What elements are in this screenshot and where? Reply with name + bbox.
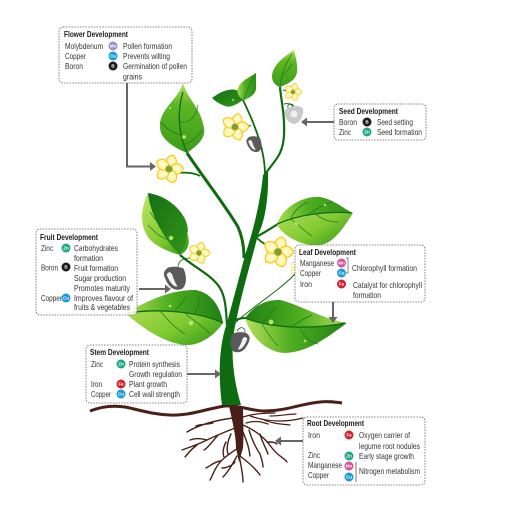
- panel: root development: Nitrogen metabolism: [359, 466, 420, 476]
- panel: leaf development: Iron: [300, 279, 312, 289]
- panel: root development: Mn: [346, 464, 352, 469]
- panel: seed development: Seed formation: [377, 127, 422, 137]
- panel: seed development: Seed setting: [377, 117, 413, 127]
- panel: seed development: Boron: [339, 117, 357, 127]
- panel: flower development: Pollen formation: [123, 41, 172, 51]
- panel: leaf development: Cu: [338, 271, 345, 276]
- panel: root development: Zn: [346, 454, 352, 459]
- arrow: stem: [187, 370, 221, 378]
- panel: fruit development: Improves flavour of: [74, 293, 134, 303]
- panel: stem development: Cu: [118, 392, 124, 397]
- panel: fruit development: formation: [74, 253, 103, 263]
- panel: fruit development: Zn: [63, 246, 69, 251]
- panel: root development: [303, 417, 425, 485]
- panel: seed development: B: [365, 120, 369, 125]
- fruits and seed: [164, 104, 303, 352]
- panel: leaf development: Manganese: [300, 258, 334, 268]
- heading: flower: Flower Development: [64, 29, 128, 39]
- panel: root development: Early stage growth: [359, 451, 414, 461]
- panel: flower development: Boron: [65, 61, 83, 71]
- arrow: fruit: [139, 284, 171, 294]
- panel: leaf development: Chlorophyll formation: [352, 263, 417, 273]
- panel: fruit development: [36, 229, 137, 315]
- panel: stem development: Zn: [118, 362, 124, 367]
- panel: root development: Cu: [346, 475, 352, 480]
- panel: leaf development: [295, 245, 425, 302]
- panel: fruit development: Copper: [41, 293, 62, 303]
- arrow: flower: [127, 83, 156, 171]
- panel: stem development: Protein synthesis: [129, 359, 180, 369]
- panel: seed development: Zn: [364, 130, 370, 135]
- arrow: seed: [301, 118, 335, 126]
- panel: root development: Zinc: [308, 450, 321, 460]
- panel: stem development: [86, 345, 187, 403]
- panel: fruit development: fruits & vegetables: [74, 302, 130, 312]
- panel: stem development: Iron: [91, 379, 102, 389]
- panel: root development: Copper: [308, 470, 329, 480]
- panel: fruit development: Sugar production: [74, 273, 126, 283]
- panel: flower development: Mo: [110, 44, 116, 49]
- panel: root development: legume root nodules: [359, 441, 420, 451]
- soil line: [90, 402, 342, 415]
- panel: fruit development: Promotes maturity: [74, 283, 131, 293]
- panel: stem development: Copper: [91, 389, 111, 399]
- panel: flower development: Molybdenum: [65, 41, 103, 51]
- panel: leaf development: Copper: [300, 268, 321, 278]
- panel: flower development: Copper: [65, 51, 86, 61]
- roots: [182, 406, 303, 482]
- heading: fruit: Fruit Development: [40, 232, 98, 242]
- panel: fruit development: B: [64, 265, 68, 270]
- arrow: root: [275, 436, 303, 446]
- panel: flower development: grains: [123, 72, 142, 82]
- panel: flower development: [59, 27, 192, 83]
- heading: seed: Seed Development: [339, 106, 398, 116]
- panel: stem development: Fe: [118, 382, 124, 387]
- panel: fruit development: Boron: [41, 262, 58, 272]
- panel: flower development: Cu: [110, 54, 116, 59]
- panel: root development: Iron: [308, 430, 320, 440]
- leaf: top left: [160, 83, 204, 153]
- panel: flower development: Germination of pollen: [123, 61, 187, 71]
- panel: leaf development: Catalyst for chlorophyll: [353, 280, 422, 290]
- panel: seed development: Zinc: [339, 127, 352, 137]
- panel: fruit development: Zinc: [41, 243, 54, 253]
- panel: root development: Manganese: [308, 460, 342, 470]
- panel: seed development: [334, 104, 426, 140]
- panel: flower development: B: [111, 64, 115, 69]
- panel: fruit development: Fruit formation: [74, 263, 118, 273]
- panel: stem development: Plant growth: [129, 379, 167, 389]
- panel: flower development: Prevents wilting: [123, 51, 170, 61]
- panel: leaf development: formation: [353, 290, 381, 300]
- stem: [178, 87, 295, 405]
- panel: stem development: Zinc: [91, 359, 104, 369]
- heading: root: Root Development: [307, 418, 364, 428]
- leaf: big right: [245, 300, 347, 353]
- arrow: leaf: [328, 302, 338, 323]
- heading: stem: Stem Development: [90, 347, 149, 357]
- leaf: left: [142, 193, 189, 255]
- flowers: [154, 82, 307, 277]
- leaf: big left: [125, 290, 223, 345]
- leaf: top right: [272, 50, 297, 87]
- panel: root development: Fe: [346, 433, 352, 438]
- panel: root development: Oxygen carrier of: [359, 430, 410, 440]
- panel: stem development: Growth regulation: [129, 369, 182, 379]
- panel: fruit development: Carbohydrates: [74, 243, 118, 253]
- leaf: upper right: [277, 197, 353, 245]
- panel: fruit development: Cu: [63, 296, 69, 301]
- heading: leaf: Leaf Development: [299, 247, 356, 257]
- panel: leaf development: Mn: [338, 261, 345, 266]
- leaf: top middle pair: [212, 73, 256, 107]
- panel: leaf development: Fe: [339, 282, 345, 287]
- panel: stem development: Cell wall strength: [129, 389, 180, 399]
